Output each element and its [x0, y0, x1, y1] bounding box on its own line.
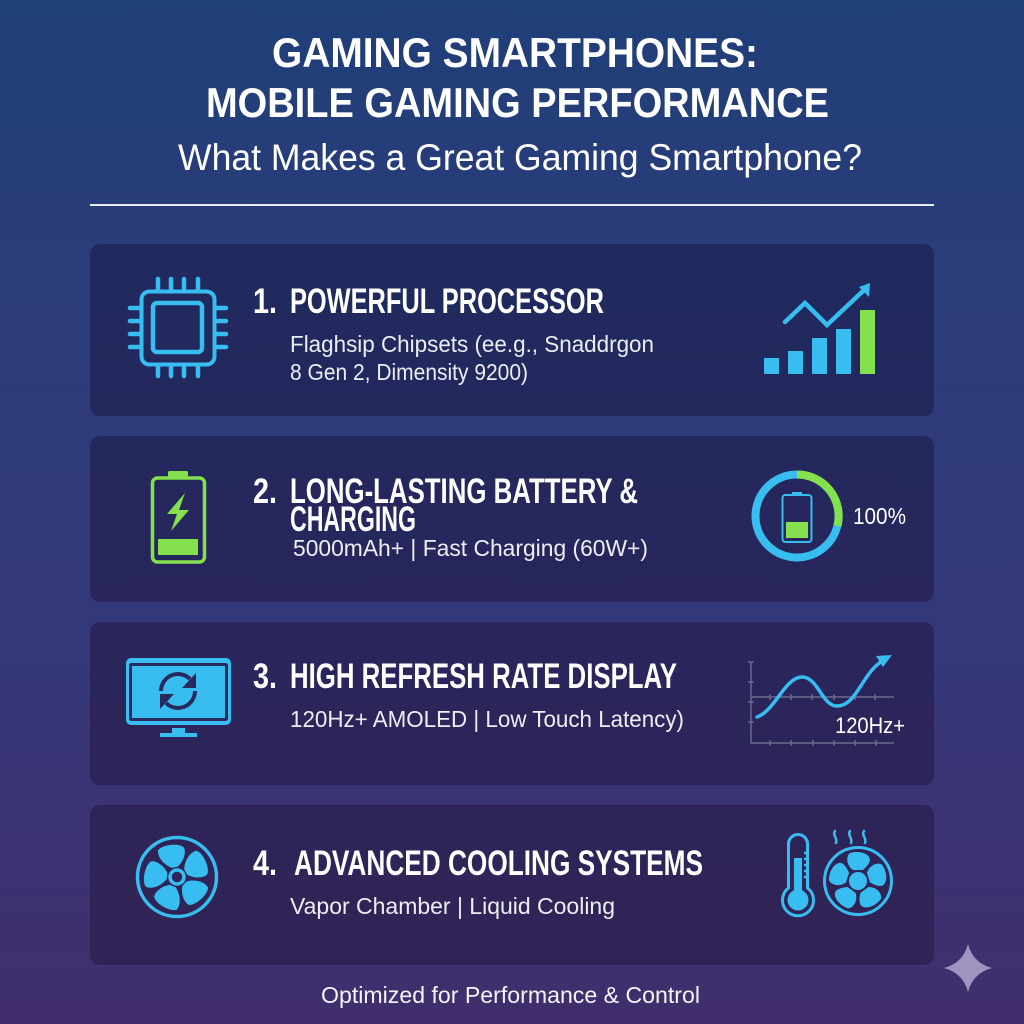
- text: battery details: 5000mAh+ | Fast Charging (60W+): [293, 535, 648, 561]
- heading: cooling systems: 4.: [253, 844, 277, 883]
- panel: powerful processor: [90, 244, 934, 416]
- icon: processor chip: [130, 279, 226, 376]
- heading: battery and charging: LONG-LASTING BATTERY &: [290, 472, 638, 511]
- heading: cooling systems: [253, 844, 703, 883]
- heading: refresh rate display: HIGH REFRESH RATE DISPLAY: [290, 657, 677, 696]
- title: MOBILE GAMING PERFORMANCE: [206, 79, 829, 126]
- text: cooling details: Vapor Chamber | Liquid Cooling: [290, 893, 615, 919]
- icon: monitor with refresh arrows: [126, 658, 231, 737]
- heading: powerful processor: POWERFUL PROCESSOR: [290, 282, 604, 321]
- chart: battery ring at 100%: 100%: [853, 503, 906, 529]
- heading: powerful processor: 1.: [253, 282, 277, 321]
- heading: powerful processor: [253, 282, 604, 321]
- text: display details: 120Hz+ AMOLED | Low Touch Latency): [290, 706, 684, 732]
- text: processor details: 8 Gen 2, Dimensity 9200): [290, 359, 528, 385]
- subtitle: What Makes a Great Gaming Smartphone?: [178, 137, 862, 178]
- heading: refresh rate display: [253, 657, 677, 696]
- heading: battery and charging: [253, 472, 638, 539]
- heading: refresh rate display: 3.: [253, 657, 277, 696]
- chart: refresh rate curve: 120Hz+: [835, 713, 905, 738]
- footer tagline: Optimized for Performance & Control: [321, 982, 700, 1008]
- panel: battery and charging: [90, 436, 934, 602]
- text: processor details: [290, 331, 654, 385]
- chart: battery ring at 100%: [756, 474, 906, 558]
- chart: rising bars with arrow: [764, 283, 875, 374]
- heading: battery and charging: CHARGING: [290, 500, 416, 539]
- panel: cooling systems: [90, 805, 934, 965]
- icon: battery with bolt: [152, 471, 204, 562]
- title: [206, 29, 829, 126]
- icon: sparkle watermark: [944, 944, 992, 992]
- panel: refresh rate display: [90, 622, 934, 785]
- heading: battery and charging: 2.: [253, 472, 277, 511]
- heading: cooling systems: ADVANCED COOLING SYSTEMS: [294, 844, 703, 883]
- icon: cooling fan: [136, 838, 219, 918]
- chart: refresh rate curve: [748, 655, 905, 746]
- text: processor details: Flaghsip Chipsets (ee.g., Snaddrgon: [290, 331, 654, 357]
- title: GAMING SMARTPHONES:: [272, 29, 758, 76]
- icon: thermometer and heat fan: [782, 831, 892, 916]
